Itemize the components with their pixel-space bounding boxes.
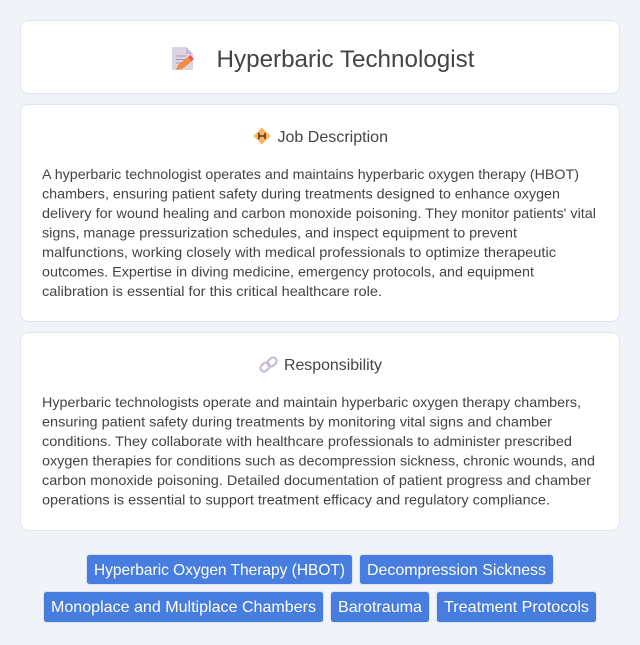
- text block: responsibility: ensuring patient safety during treatments by monitoring vital signs and chamber: [42, 414, 552, 430]
- text block: job description: signs, manage pressurization schedules, and inspect equipment to prevent: [42, 224, 517, 240]
- text block: responsibility: operations is essential to support treatment efficacy and regulatory compliance.: [42, 492, 550, 508]
- text block: responsibility: conditions. They collaborate with healthcare professionals to administer prescribed: [42, 433, 572, 449]
- tag: Decompression Sickness: Decompression Sickness: [367, 562, 546, 579]
- tag: Monoplace and Multiplace Chambers: Monoplace and Multiplace Chambers: [51, 599, 316, 616]
- tag: Hyperbaric Oxygen Therapy: Hyperbaric Oxygen Therapy (HBOT): [94, 562, 345, 579]
- panel: responsibility: [20, 332, 620, 530]
- text block: job description: delivery for wound healing and carbon monoxide poisoning. They monitor patients' vital: [42, 205, 596, 221]
- text block: responsibility: oxygen therapies for conditions such as decompression sickness, chronic wounds, and: [42, 452, 595, 468]
- text block: job description: A hyperbaric technologist operates and maintains hyperbaric oxygen therapy (HBOT): [42, 166, 579, 182]
- icon: document with pencil: [172, 47, 194, 70]
- heading: job description: Job Description: [278, 129, 388, 146]
- heading: responsibility: Responsibility: [284, 357, 382, 374]
- text block: job description: outcomes. Expertise in diving medicine, emergency protocols, and equipment: [42, 264, 534, 280]
- text block: responsibility: [42, 394, 595, 508]
- tag: Treatment Protocols: Treatment Protocols: [444, 599, 589, 616]
- text block: job description: calibration is essential for this critical healthcare role.: [42, 283, 382, 299]
- icon: diamond sign: [254, 128, 270, 144]
- tag: Barotrauma: [330, 592, 430, 622]
- tag: Treatment Protocols: [436, 592, 596, 622]
- text block: responsibility: Hyperbaric technologists operate and maintain hyperbaric oxygen therapy chambers,: [42, 394, 581, 410]
- tag: Hyperbaric Oxygen Therapy: [86, 554, 352, 584]
- tag: Barotrauma: Barotrauma: [338, 599, 422, 616]
- text block: job description: chambers, ensuring patient safety during treatments designed to enhance oxygen: [42, 186, 560, 202]
- panel: title: [20, 20, 620, 94]
- text block: responsibility: carbon monoxide poisoning. Detailed documentation of patient progress and chamber: [42, 472, 591, 488]
- text block: job description: [42, 166, 596, 299]
- panel: job description: [20, 104, 620, 322]
- text block: job description: malfunctions, working closely with medical professionals to optimize therapeutic: [42, 244, 556, 260]
- icon: chain link: [259, 356, 278, 373]
- title text: Hyperbaric Technologist: [216, 46, 475, 73]
- tag: Decompression Sickness: [360, 554, 554, 584]
- tag: Monoplace and Multiplace Chambers: [44, 592, 324, 622]
